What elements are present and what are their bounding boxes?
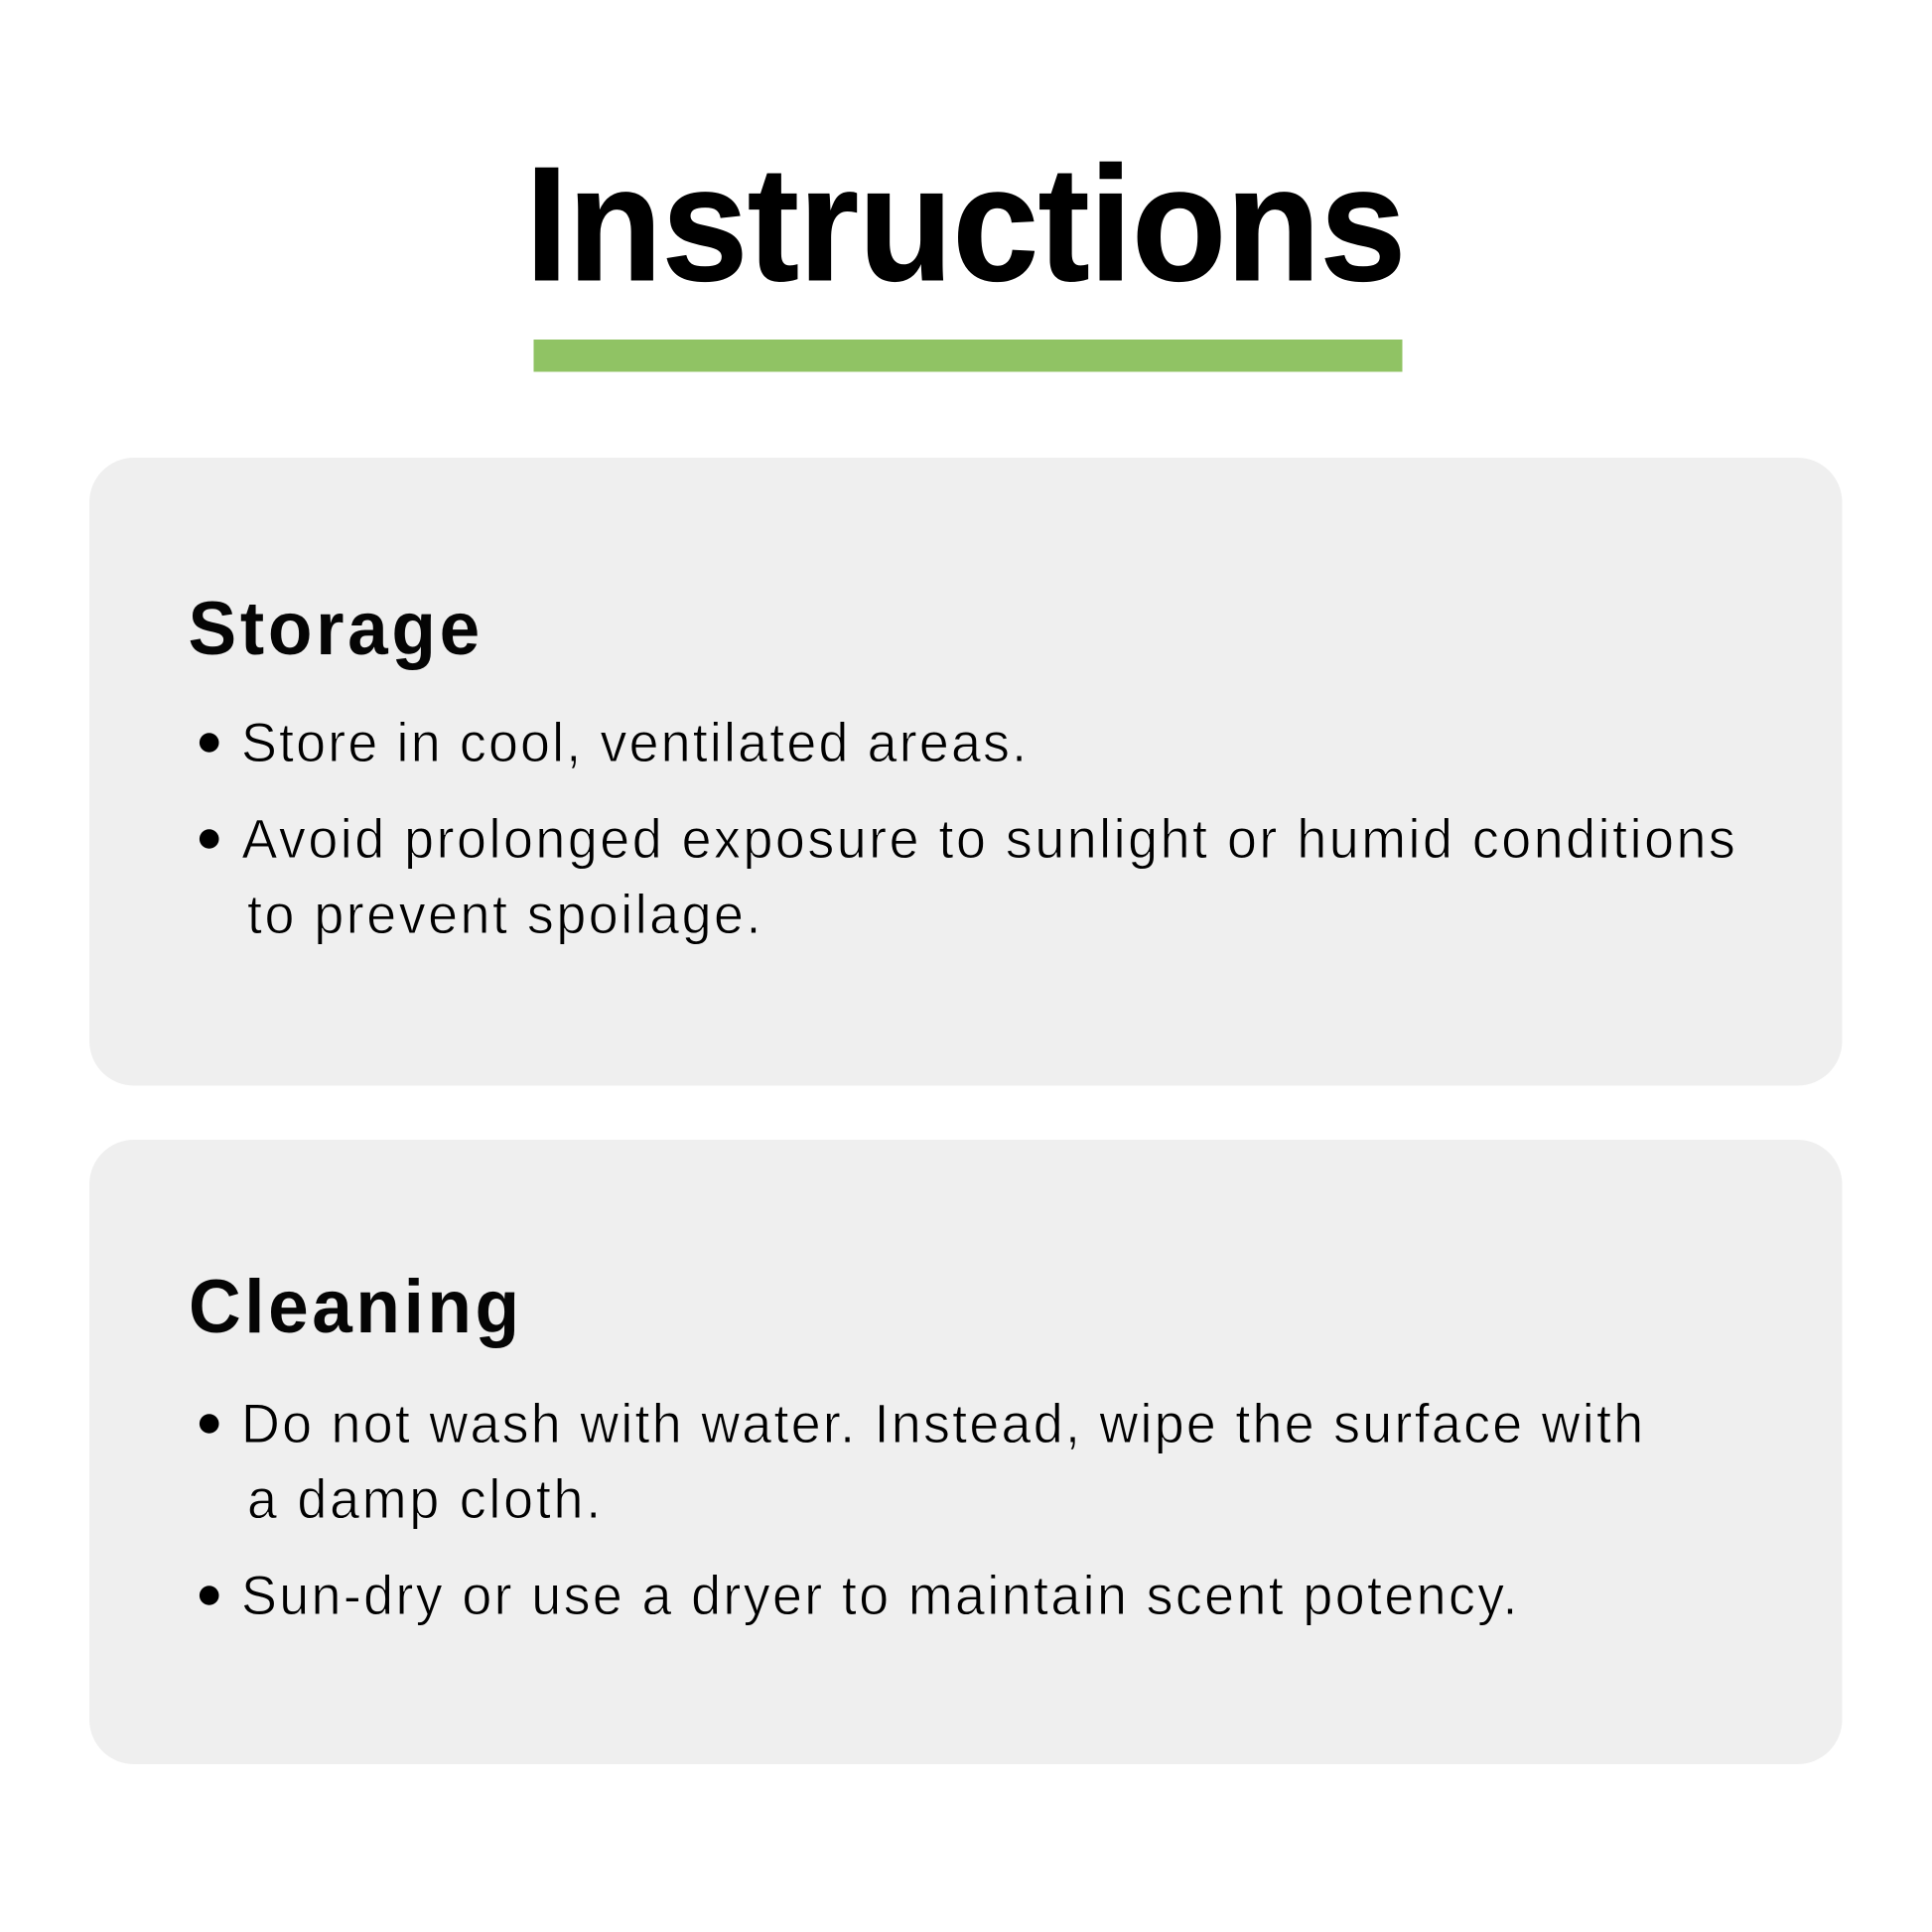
panel: cleaning	[89, 1140, 1843, 1764]
bullet item: do not wash with water: Do not wash with water. Instead, wipe the surface with	[241, 1392, 1643, 1454]
bullet item: store in cool areas: Store in cool, ventilated areas.	[241, 711, 1027, 773]
bullet item: avoid prolonged exposure	[200, 807, 1735, 945]
bullet item: avoid prolonged exposure: Avoid prolonged exposure to sunlight or humid conditions	[242, 807, 1735, 870]
title: Instructions	[525, 132, 1406, 315]
bullet item: sun-dry: Sun-dry or use a dryer to maintain scent potency.	[241, 1564, 1517, 1626]
heading: storage: Storage	[189, 587, 480, 670]
bullet item: do not wash with water	[200, 1392, 1643, 1530]
title underline	[534, 340, 1402, 371]
bullet item: do not wash with water: a damp cloth.	[247, 1467, 601, 1530]
panel: storage	[89, 458, 1843, 1086]
bullet item: avoid prolonged exposure: to prevent spoilage.	[247, 883, 760, 945]
heading: cleaning: Cleaning	[189, 1265, 519, 1348]
